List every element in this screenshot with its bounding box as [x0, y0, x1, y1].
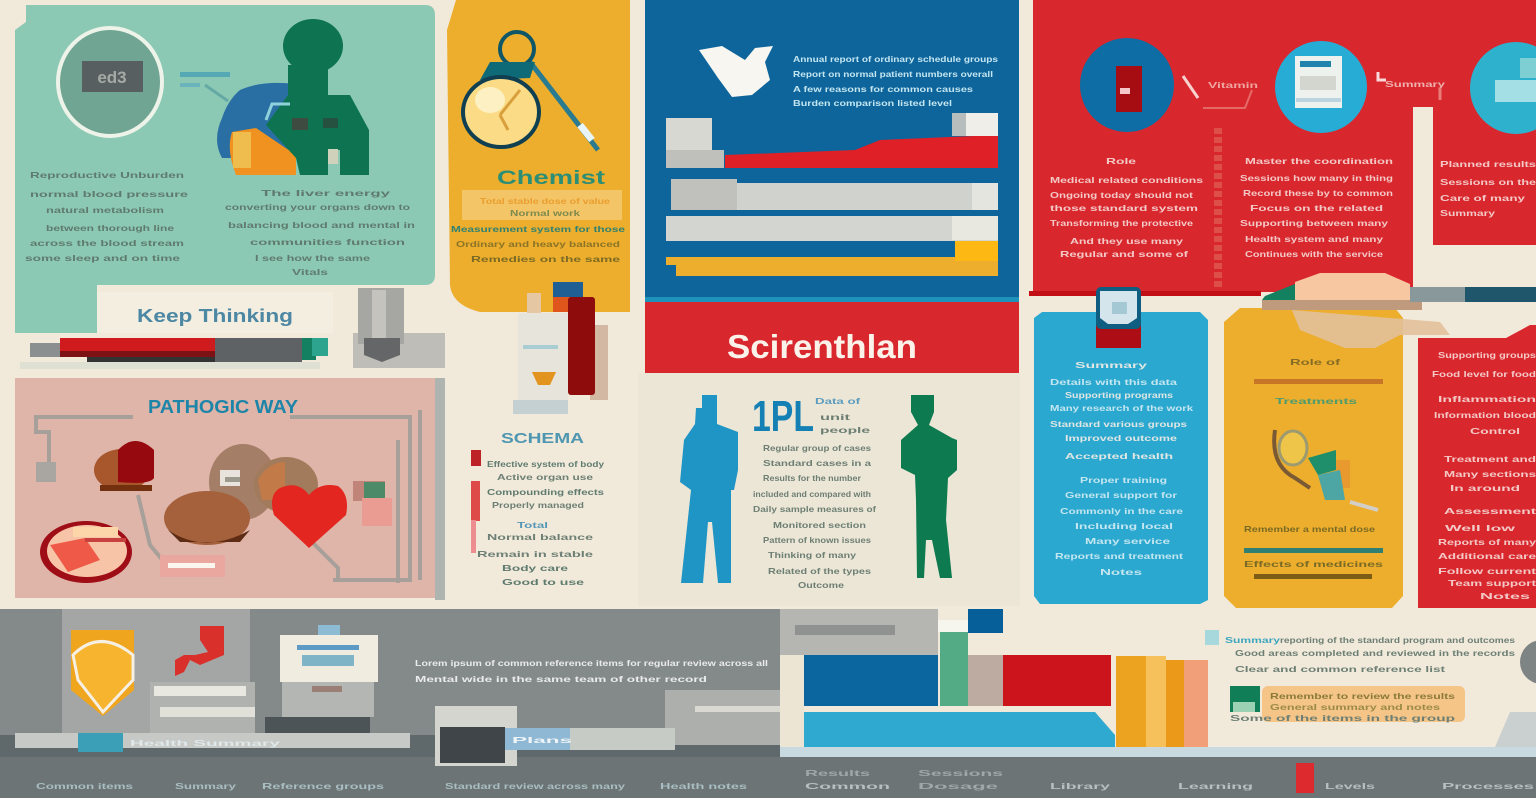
text block: red middle column: Continues with the service [1245, 249, 1383, 259]
text block: right red: In around [1450, 483, 1520, 493]
text block: right red [1432, 350, 1536, 601]
text block: right red: Many sections [1444, 469, 1536, 479]
icon: monitor [435, 706, 517, 766]
text block: right red: Reports of many [1438, 537, 1536, 547]
footer labels: Learning [1178, 781, 1253, 791]
callout: peach note with green icon: Some of the items in the group [1230, 713, 1455, 723]
text block: note right: Clear and common reference list [1235, 664, 1445, 674]
label: connector two [1378, 72, 1445, 100]
text block: red left column: Regular and some of [1060, 249, 1188, 259]
text block: blue article: General support for [1065, 490, 1178, 500]
text block: red right column: Planned results [1440, 159, 1536, 169]
text block: yellow panel: Remedies on the same [471, 254, 620, 264]
text block: left column: between thorough line [46, 223, 174, 233]
icon: hand holding pen [1262, 273, 1536, 348]
icon: circle badge: ed3 [97, 68, 127, 87]
footer labels: Common [805, 781, 890, 791]
panel: right red panel [1418, 325, 1536, 608]
text block: yellow lower [1244, 524, 1383, 579]
heading: pathology: PATHOGIC WAY [148, 397, 298, 417]
icon: meat cut [40, 521, 132, 583]
text block: right red: Additional care [1438, 551, 1536, 561]
label: connector one: Vitamin [1208, 80, 1258, 90]
text block: red right column [1440, 159, 1536, 218]
callout: peach note with green icon: Remember to review the results [1270, 691, 1455, 701]
connector lines [36, 410, 420, 583]
icon: stacked trays [150, 682, 255, 736]
text block: right column [225, 188, 415, 277]
icon: green person [901, 395, 957, 578]
icon: info card [265, 625, 378, 737]
icon: blue person [680, 395, 738, 583]
icon: shield highlight [73, 642, 133, 712]
text block: blue article: Improved outcome [1065, 433, 1177, 443]
text block: blue panel: Burden comparison listed level [793, 98, 952, 108]
panel: red information panel [1029, 0, 1536, 296]
icon: stopwatch with needle [463, 32, 598, 150]
text block: red left column: those standard system [1050, 203, 1199, 213]
text block: note right: Summary [1225, 635, 1280, 645]
text lines: schema: Effective system of body [487, 459, 604, 469]
text block: right red: Information blood [1434, 410, 1536, 420]
text lines: schema: Remain in stable [477, 549, 593, 559]
footer labels: Processes [1442, 781, 1535, 791]
text block: blue article: Commonly in the care [1060, 506, 1183, 516]
heading: big number [752, 392, 870, 441]
bar chart: horizontal bars [666, 113, 998, 276]
text lines: schema: Properly managed [492, 500, 584, 510]
text block: yellow lower: Effects of medicines [1244, 559, 1383, 569]
text block: comparison: Regular group of cases [763, 443, 871, 453]
text block: comparison: Thinking of many [768, 550, 856, 560]
heading: chemist: Chemist [497, 168, 606, 189]
text block: right red: Control [1470, 426, 1520, 436]
text block: right red: Inflammation [1438, 394, 1536, 404]
text block: right red: Food level for food [1432, 369, 1536, 379]
text block: red middle column: Record these by to common [1243, 188, 1393, 198]
icon: plug body [36, 462, 56, 482]
icon: brown organs [164, 444, 318, 545]
text block: red left column [1050, 156, 1203, 259]
text block: blue article: Many research of the work [1050, 403, 1193, 413]
heading: big number: Data of [815, 396, 860, 406]
block chart: coloured blocks [780, 609, 1208, 747]
text block: red left column: Ongoing today should not [1050, 190, 1193, 200]
text block: red middle column: Focus on the related [1250, 203, 1383, 213]
text block: blue article: Standard various groups [1050, 419, 1187, 429]
footer labels: Dosage [918, 781, 999, 791]
text block: blue panel: Report on normal patient numbers overall [793, 69, 993, 79]
text block: right column: balancing blood and mental in [228, 220, 415, 230]
text block: blue panel: A few reasons for common causes [793, 84, 973, 94]
heading: big number: unit [820, 412, 850, 422]
footer labels: Library [1050, 781, 1111, 791]
text block: note right: Good areas completed and reviewed in the records [1235, 648, 1515, 658]
text block: blue article [1050, 360, 1193, 577]
text block: red middle column: Supporting between many [1240, 218, 1388, 228]
footer labels: Levels [1325, 781, 1376, 791]
icon: person with organs [217, 19, 369, 175]
icon: bottle and vial [513, 282, 608, 414]
footer labels [36, 763, 1535, 793]
icon: teal circle [1470, 42, 1536, 134]
text block: comparison: Standard cases in a [763, 458, 871, 468]
text block: red right column: Sessions on the [1440, 177, 1536, 187]
footer labels: Sessions [918, 768, 1004, 778]
text block: blue panel: Annual report of ordinary schedule groups [793, 54, 998, 64]
panel: heading banner [97, 292, 333, 333]
text block: left column: normal blood pressure [30, 189, 188, 199]
text block: right red: Supporting groups [1438, 350, 1536, 360]
text block: yellow heading [1254, 357, 1383, 406]
text block: note right: reporting of the standard program and outcomes [1280, 635, 1515, 645]
icon: heart [272, 485, 347, 548]
icon: organ and red fruit [94, 441, 154, 491]
text block: left column [25, 170, 188, 263]
label: connector one [1183, 76, 1258, 108]
text block: left column: natural metabolism [46, 205, 165, 215]
panel: teal health panel [15, 5, 435, 333]
text block: red left column: Transforming the protective [1050, 218, 1193, 228]
panel: yellow treatment panel [1224, 308, 1403, 608]
icon: red arrow mark [175, 626, 224, 676]
text lines: schema: Body care [502, 563, 568, 573]
callout: peach note with green icon [1230, 686, 1465, 723]
text block: red left column: And they use many [1070, 236, 1183, 246]
text block: red middle column: Master the coordination [1245, 156, 1393, 166]
text block: yellow heading: Role of [1290, 357, 1340, 367]
translucent strip left: Health Summary [130, 738, 281, 748]
icon: small green and pink tag [353, 481, 392, 526]
footer labels: Reference groups [262, 781, 384, 791]
text block: blue article: Summary [1075, 360, 1147, 370]
text block: right red: Team support [1448, 578, 1536, 588]
panel: yellow chemist panel [447, 0, 630, 312]
panel: grey footer band [0, 609, 1536, 798]
text block: comparison: Daily sample measures of [753, 504, 876, 514]
text block: comparison: Monitored section [773, 520, 866, 530]
text block: right red: Well low [1445, 523, 1516, 533]
panel: grey tab [665, 690, 800, 745]
text block: left column: across the blood stream [30, 238, 185, 248]
banner: title [645, 302, 1019, 373]
footer labels: Health notes [660, 781, 747, 791]
text block: red middle column: Health system and many [1245, 234, 1383, 244]
text block: right column: communities function [250, 237, 405, 247]
label: connector two: Summary [1385, 79, 1445, 89]
text block: right red: Notes [1480, 591, 1531, 601]
text block: right column: Vitals [292, 267, 328, 277]
text block: comparison: Outcome [798, 580, 844, 590]
text block: comparison: Results for the number [763, 473, 862, 483]
text block: right red: Treatment and [1444, 454, 1536, 464]
text block: red middle column: Sessions how many in thing [1240, 173, 1393, 183]
text block: red middle column [1240, 156, 1393, 259]
icon: circle badge [58, 28, 162, 136]
text block: yellow lower: Remember a mental dose [1244, 524, 1375, 534]
text block: yellow panel: Ordinary and heavy balanced [456, 239, 620, 249]
text block: blue article: Notes [1100, 567, 1142, 577]
footer labels: Common items [36, 781, 133, 791]
heading: big number: 1PL [752, 392, 814, 441]
text block: comparison [753, 443, 876, 590]
icon: dark blue circle [1080, 38, 1174, 132]
panel: blue chart panel [645, 0, 1019, 302]
text block: right red: Assessment [1444, 506, 1536, 516]
white label bar [160, 555, 225, 577]
footer labels: Summary [175, 781, 236, 791]
text block: blue article: Details with this data [1050, 377, 1177, 387]
icon: pen and cylinder [20, 288, 445, 369]
text block: yellow panel: Total stable dose of value [480, 196, 610, 206]
text block: yellow panel [451, 190, 625, 264]
text block: comparison: included and compared with [753, 489, 871, 499]
text block: footer description: Mental wide in the same team of other record [415, 674, 707, 684]
callout connector [180, 72, 230, 101]
icon: badge on blue panel [1096, 287, 1141, 348]
heading and text: schema column [471, 430, 604, 587]
text block: note right [1205, 630, 1515, 674]
text lines: schema: Active organ use [497, 472, 593, 482]
icon: white bird [699, 46, 773, 97]
icon: shield [71, 630, 134, 716]
icon: pale corner shape [1495, 712, 1536, 747]
footer labels: Standard review across many [445, 781, 625, 791]
red side marker [471, 450, 481, 553]
text block: blue article: Accepted health [1065, 451, 1173, 461]
text block: yellow panel: Measurement system for those [451, 224, 625, 234]
panel: pink pathology panel [15, 378, 445, 600]
text block: red left column: Role [1106, 156, 1136, 166]
panel: heading banner: Keep Thinking [137, 306, 293, 326]
icon: light blue document circle [1275, 41, 1367, 133]
text block: footer description [415, 658, 768, 684]
text block: footer description: Lorem ipsum of common reference items for regular review across all [415, 658, 768, 668]
text block: left column: some sleep and on time [25, 253, 180, 263]
text block: right column: I see how the same [255, 253, 370, 263]
text block: blue article: Supporting programs [1065, 390, 1173, 400]
text block: comparison: Related of the types [768, 566, 871, 576]
text block: yellow heading: Treatments [1275, 396, 1357, 406]
heading: big number: people [820, 425, 870, 435]
icon: medical instrument [1274, 430, 1378, 510]
text block: blue article: Proper training [1080, 475, 1167, 485]
text lines: schema: Good to use [502, 577, 584, 587]
icon: grey circle edge [1520, 640, 1536, 684]
text block: red right column: Care of many [1440, 193, 1525, 203]
text block: comparison: Pattern of known issues [763, 535, 871, 545]
text block: blue article: Many service [1085, 536, 1170, 546]
heading and text: schema column: SCHEMA [501, 430, 584, 447]
text block: blue panel [793, 54, 998, 108]
callout: peach note with green icon: General summary and notes [1270, 702, 1440, 712]
text block: right red: Follow current [1438, 566, 1536, 576]
text block: red left column: Medical related conditions [1050, 175, 1203, 185]
text lines: schema [477, 459, 604, 587]
translucent strip right: Plans [512, 735, 573, 745]
text block: yellow panel: Normal work [510, 208, 580, 218]
text block: right column: converting your organs down to [225, 202, 410, 212]
text lines: schema: Total [517, 520, 548, 530]
text lines: schema: Normal balance [487, 532, 593, 542]
panel: figures comparison [638, 373, 1020, 606]
translucent strip left [15, 733, 410, 752]
text block: red right column: Summary [1440, 208, 1495, 218]
panel: blue article panel [1034, 312, 1208, 604]
footer labels: Results [805, 768, 871, 778]
text block: right column: The liver energy [261, 188, 391, 198]
text block: blue article: Reports and treatment [1055, 551, 1183, 561]
text block: left column: Reproductive Unburden [30, 170, 184, 180]
text block: blue article: Including local [1075, 521, 1173, 531]
translucent strip right [505, 728, 675, 750]
banner: title: Scirenthlan [727, 328, 917, 365]
text lines: schema: Compounding effects [487, 487, 604, 497]
dotted divider [1214, 128, 1222, 290]
